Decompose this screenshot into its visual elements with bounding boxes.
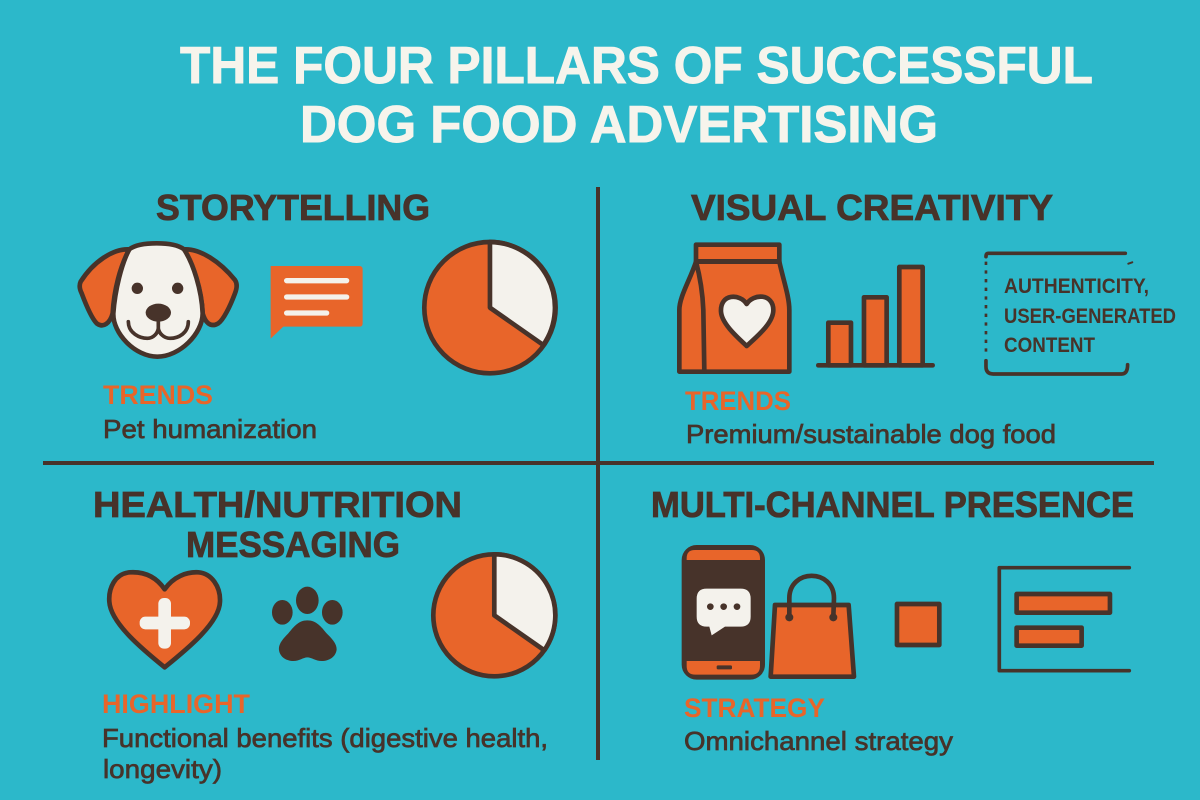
title: THE FOUR PILLARS OF SUCCESSFUL — [180, 37, 1093, 95]
text: functional benefits: Functional benefits (digestive health, — [102, 723, 548, 753]
bar chart — [818, 267, 933, 365]
heading: health/nutrition messaging — [93, 484, 462, 565]
heading: health/nutrition messaging: MESSAGING — [186, 524, 400, 565]
panel: health and nutrition messaging — [93, 484, 555, 784]
panel: storytelling — [80, 187, 556, 444]
title — [180, 37, 1093, 154]
icon: dog face — [80, 243, 237, 357]
chart: framed horizontal bars — [999, 568, 1129, 671]
text: premium sustainable: Premium/sustainable dog food — [686, 419, 1056, 449]
text: functional benefits — [102, 723, 548, 784]
callout: authenticity: CONTENT — [1004, 334, 1095, 357]
title: DOG FOOD ADVERTISING — [300, 96, 938, 154]
pie chart: health — [433, 554, 555, 676]
icon: smartphone — [684, 547, 763, 677]
heading: storytelling: STORYTELLING — [156, 187, 430, 228]
panel: multi-channel presence — [651, 484, 1134, 756]
heading: multi-channel presence: MULTI-CHANNEL PRESENCE — [651, 484, 1134, 525]
callout: authenticity: AUTHENTICITY, — [1004, 275, 1149, 298]
icon: dog food bag — [679, 245, 789, 372]
icon: square — [897, 604, 939, 645]
callout: authenticity — [986, 253, 1176, 374]
text: trends label: TRENDS — [685, 386, 791, 416]
text: trends label: TRENDS — [103, 380, 213, 410]
text: highlight label: HIGHLIGHT — [102, 689, 250, 719]
icon: paw print — [272, 587, 343, 661]
text: strategy label: STRATEGY — [684, 693, 825, 723]
text: omnichannel strategy: Omnichannel strategy — [684, 726, 953, 756]
icon: speech bubble — [271, 266, 363, 339]
callout: authenticity: USER-GENERATED — [1004, 305, 1176, 328]
heading: visual creativity: VISUAL CREATIVITY — [691, 187, 1053, 228]
heading: health/nutrition messaging: HEALTH/NUTRITION — [93, 484, 462, 525]
text: pet humanization: Pet humanization — [103, 414, 317, 444]
icon: shopping bag — [771, 576, 854, 677]
pie chart: storytelling — [424, 242, 556, 373]
text: functional benefits: longevity) — [103, 754, 222, 784]
panel: visual creativity — [679, 187, 1176, 449]
icon: heart with cross — [109, 572, 220, 667]
